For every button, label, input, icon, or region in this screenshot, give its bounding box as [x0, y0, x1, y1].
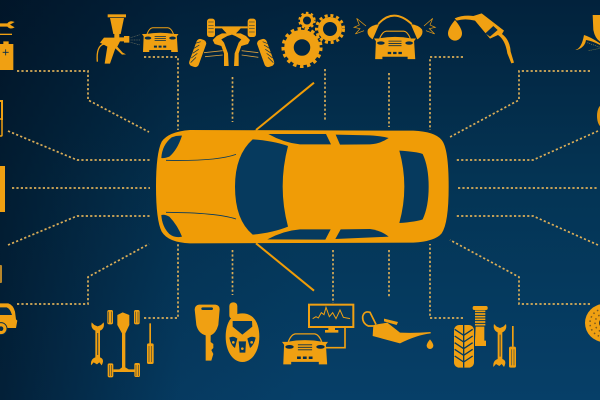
open door upper — [256, 83, 314, 130]
icon: clipped tow car at bottom left — [0, 303, 17, 335]
hood creases — [166, 154, 236, 160]
icon: wrench, chassis and screwdriver — [91, 310, 154, 377]
icon: clipped left tools — [0, 101, 5, 283]
icon: brake disc, clipped at right — [585, 304, 600, 342]
headlights — [161, 136, 182, 158]
icon: shield and hand, clipped at right — [575, 15, 600, 51]
dotted connector lines — [8, 57, 598, 318]
icon: painted car — [142, 28, 178, 52]
windshield — [235, 139, 288, 235]
side windows — [268, 134, 331, 144]
icon: diagnostic car — [282, 334, 328, 364]
central car, top view — [156, 83, 449, 291]
icon: fuel nozzle and drop — [448, 13, 514, 63]
icon: tyre and shock absorber — [454, 306, 516, 368]
icon: gears — [283, 13, 344, 66]
open door lower — [256, 243, 314, 291]
icon: car alarm remote — [226, 302, 259, 362]
icon: suspension and wheels — [188, 19, 275, 68]
icon: clipped right gauge — [597, 105, 600, 127]
icon: oil can — [363, 312, 433, 349]
icon: car key — [195, 305, 220, 361]
icon: car with ear protectors — [354, 16, 435, 59]
rear window — [399, 151, 429, 223]
icon: diagnostic monitor — [309, 305, 353, 348]
icon: spray gun — [97, 14, 140, 64]
car body — [156, 130, 449, 243]
icon: wrench and battery — [0, 21, 15, 70]
